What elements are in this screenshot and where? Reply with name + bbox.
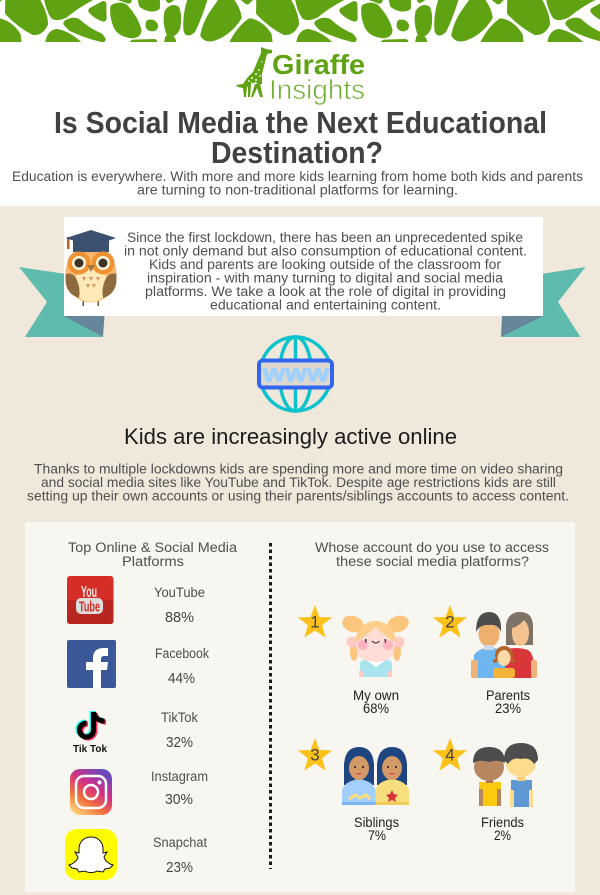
paragraph: lockdowns: and social media sites like YouTube and TikTok. Despite age restrictions kids are still bbox=[41, 475, 556, 490]
rank 2: star: 2 bbox=[445, 612, 455, 632]
callout text: educational and entertaining content. bbox=[210, 298, 441, 312]
rank 1: star: 1 bbox=[310, 612, 320, 632]
label: siblings: Siblings bbox=[354, 814, 399, 830]
rank 4: star bbox=[433, 738, 467, 771]
logo wordmark top: Giraffe bbox=[272, 49, 365, 80]
YouTube stat: 88% bbox=[165, 609, 194, 626]
YouTube stat bbox=[154, 585, 205, 626]
icon: owl with graduation cap bbox=[66, 230, 116, 306]
Instagram stat: 30% bbox=[165, 791, 193, 808]
callout text: Kids and parents are looking outside of the classroom for bbox=[149, 257, 502, 272]
panel: survey results bbox=[25, 522, 575, 892]
label: parents bbox=[486, 687, 530, 716]
Instagram stat bbox=[151, 769, 208, 808]
icon: Instagram bbox=[70, 769, 112, 815]
label: parents: Parents bbox=[486, 687, 530, 703]
label: friends: Friends bbox=[481, 814, 524, 830]
icon: YouTube bbox=[67, 576, 114, 624]
Facebook stat: Facebook bbox=[155, 646, 209, 661]
rank 1: star bbox=[298, 605, 332, 638]
icon: YouTube: You bbox=[81, 584, 97, 601]
YouTube stat: YouTube bbox=[154, 585, 205, 600]
www label: www bbox=[262, 360, 329, 388]
icon: friends bbox=[473, 743, 538, 807]
icon: TikTok: Tik Tok bbox=[73, 744, 107, 755]
heading: whose account bbox=[315, 540, 549, 569]
callout text: in not only demand but also consumption of educational content. bbox=[124, 244, 527, 258]
callout box bbox=[64, 217, 543, 316]
ribbon right bbox=[501, 267, 586, 337]
label: friends bbox=[481, 814, 524, 843]
title bbox=[54, 105, 547, 170]
icon: girl bbox=[340, 613, 411, 677]
ribbon left bbox=[19, 267, 103, 337]
label: my own: 68% bbox=[363, 700, 389, 716]
paragraph: lockdowns: Thanks to multiple lockdowns kids are spending more and more time on video sharing bbox=[34, 462, 563, 476]
heading: whose account: Whose account do you use to access bbox=[315, 540, 549, 555]
icon: www globe bbox=[259, 337, 332, 411]
Instagram stat: Instagram bbox=[151, 769, 208, 784]
ribbon fold left bbox=[64, 316, 104, 337]
giraffe pattern banner bbox=[0, 0, 600, 45]
icon: Facebook bbox=[67, 640, 116, 688]
heading: top platforms: Top Online & Social Media bbox=[68, 540, 238, 555]
label: my own: My own bbox=[353, 687, 399, 703]
icon: parents bbox=[471, 612, 537, 678]
TikTok stat: TikTok bbox=[161, 710, 198, 725]
ribbon fold right bbox=[501, 316, 543, 337]
icon: Snapchat bbox=[65, 829, 117, 880]
icon: TikTok bbox=[73, 711, 107, 755]
TikTok stat: 32% bbox=[166, 734, 193, 751]
callout text: platforms. We take a look at the role of digital in providing bbox=[145, 284, 506, 299]
label: parents: 23% bbox=[495, 700, 521, 716]
rank 2: star bbox=[433, 605, 467, 638]
page background bbox=[0, 206, 600, 895]
Snapchat stat bbox=[153, 835, 207, 876]
label: my own bbox=[353, 687, 399, 716]
logo wordmark bottom: Insights bbox=[269, 74, 365, 105]
title: Is Social Media the Next Educational bbox=[54, 105, 547, 140]
logo: Giraffe Insights bbox=[236, 47, 365, 105]
rank 3: star bbox=[298, 738, 332, 771]
panel: ribbon callout bbox=[19, 217, 586, 337]
heading: kids active online: Kids are increasingly active online bbox=[124, 424, 457, 449]
rank 3: star: 3 bbox=[310, 746, 320, 764]
title: Destination? bbox=[211, 135, 383, 170]
label: siblings bbox=[354, 814, 399, 843]
intro text: Education is everywhere. With more and more kids learning from home both kids and parents bbox=[12, 169, 583, 184]
paragraph: lockdowns bbox=[27, 462, 569, 504]
Snapchat stat: 23% bbox=[166, 859, 193, 876]
Facebook stat bbox=[155, 646, 209, 687]
TikTok stat bbox=[161, 710, 198, 751]
callout text: inspiration - with many turning to digital and social media bbox=[147, 270, 504, 286]
dotted divider bbox=[269, 543, 272, 869]
heading: top platforms bbox=[68, 540, 238, 569]
label: friends: 2% bbox=[494, 827, 511, 843]
heading: whose account: these social media platforms? bbox=[336, 554, 529, 569]
icon: siblings bbox=[342, 747, 409, 805]
icon: giraffe bbox=[236, 47, 272, 97]
rank 4: star: 4 bbox=[445, 746, 455, 764]
header white background bbox=[0, 42, 600, 206]
intro text: are turning to non-traditional platforms for learning. bbox=[137, 182, 458, 198]
callout text: Since the first lockdown, there has been an unprecedented spike bbox=[127, 230, 523, 245]
label: siblings: 7% bbox=[368, 827, 386, 843]
Snapchat stat: Snapchat bbox=[153, 835, 207, 850]
icon: YouTube: Tube bbox=[79, 598, 100, 616]
paragraph: lockdowns: setting up their own accounts or using their parents/siblings accounts to access content. bbox=[27, 488, 569, 504]
Facebook stat: 44% bbox=[168, 670, 195, 687]
intro text bbox=[12, 169, 583, 198]
callout text bbox=[124, 230, 527, 312]
heading: top platforms: Platforms bbox=[122, 554, 184, 569]
